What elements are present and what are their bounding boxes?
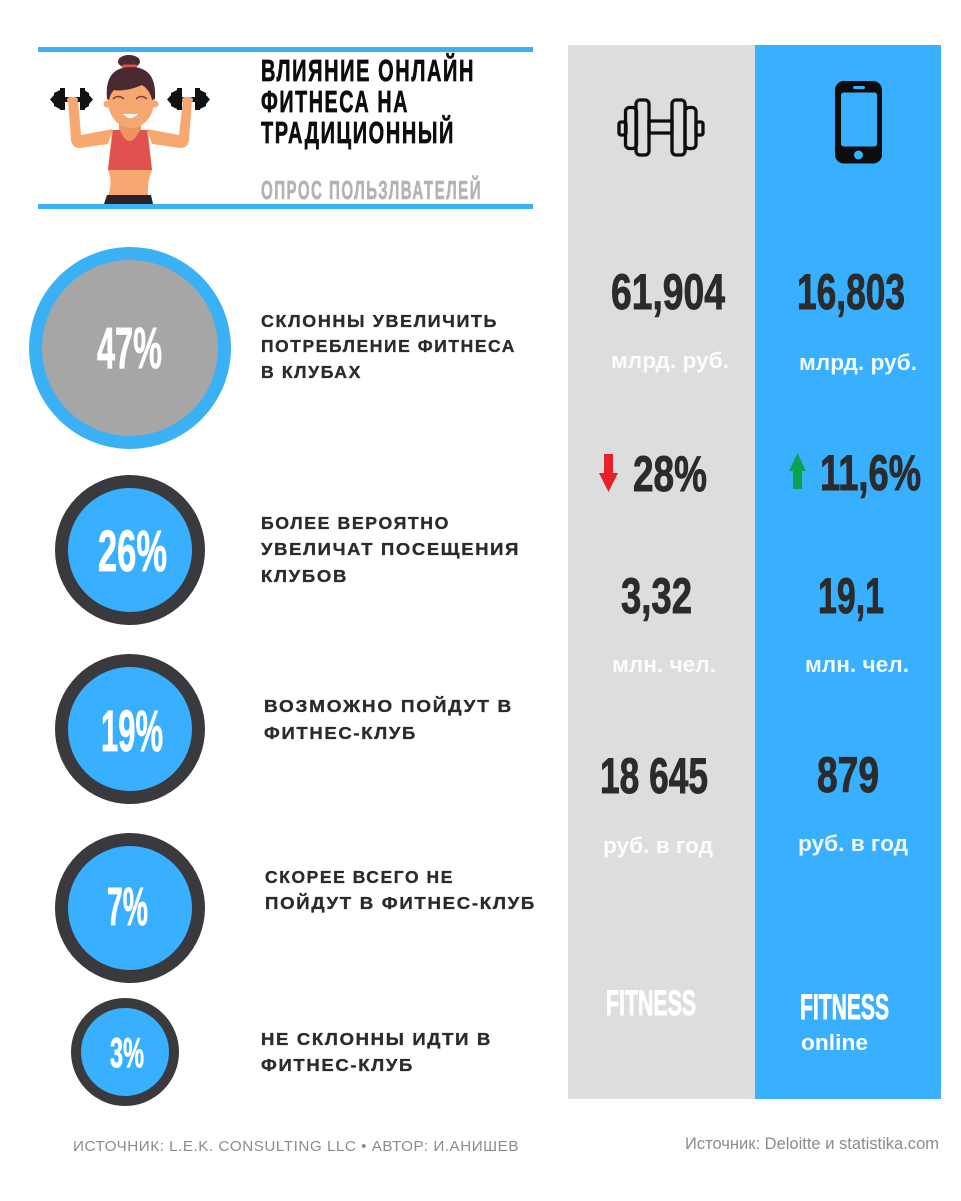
stat: 3 percent: 3% xyxy=(110,1029,144,1076)
metric: online market size: млрд. руб. xyxy=(799,350,917,375)
stat: 3 percent xyxy=(76,1003,174,1101)
icon: dumbbell xyxy=(619,100,703,155)
footer: right source: Источник: Deloitte и statistika.com xyxy=(685,1134,939,1153)
metric: traditional annual price xyxy=(600,748,713,858)
metric: online annual price: руб. в год xyxy=(798,831,908,856)
column label: fitness online xyxy=(800,988,889,1055)
metric: online market size xyxy=(797,264,917,375)
stat: 7 percent xyxy=(62,840,198,976)
header block xyxy=(38,47,533,209)
subtitle: ОПРОС ПОЛЬЗЛВАТЕЛЕЙ xyxy=(261,175,482,205)
footer: left source: ИСТОЧНИК: L.E.K. CONSULTING LLC • АВТОР: И.АНИШЕВ xyxy=(73,1138,519,1155)
column label: fitness online: FITNESS xyxy=(800,988,889,1027)
icon: woman lifting dumbbells xyxy=(50,55,210,204)
text: 3 percent description: НЕ СКЛОННЫ ИДТИ В xyxy=(261,1029,492,1049)
stat: 47 percent: 47% xyxy=(97,316,162,381)
icon: smartphone xyxy=(835,81,882,164)
title: ВЛИЯНИЕ ОНЛАЙН xyxy=(261,52,475,88)
metric: traditional users: млн. чел. xyxy=(612,652,716,677)
column label: fitness online: online xyxy=(801,1030,868,1055)
text: 7 percent description: СКОРЕЕ ВСЕГО НЕ xyxy=(265,867,454,887)
text: 47 percent description: СКЛОННЫ УВЕЛИЧИТЬ xyxy=(261,311,498,331)
title xyxy=(261,52,475,150)
metric: online change xyxy=(789,445,921,501)
text: 19 percent description: ВОЗМОЖНО ПОЙДУТ В xyxy=(264,695,513,716)
text: 47 percent description: ПОТРЕБЛЕНИЕ ФИТНЕСА xyxy=(261,336,516,356)
text: 26 percent description xyxy=(261,513,520,586)
text: 7 percent description: ПОЙДУТ В ФИТНЕС-КЛУБ xyxy=(265,892,536,913)
text: 26 percent description: УВЕЛИЧАТ ПОСЕЩЕНИЯ xyxy=(261,539,520,559)
stat: 26 percent xyxy=(62,482,198,618)
text: 7 percent description xyxy=(265,867,536,913)
metric: traditional annual price: руб. в год xyxy=(603,833,713,858)
text: 19 percent description xyxy=(264,695,513,743)
metric: online users: 19,1 xyxy=(818,568,884,624)
title: ФИТНЕСА НА xyxy=(261,84,409,119)
text: 47 percent description xyxy=(261,311,516,382)
icon: red down arrow xyxy=(599,454,618,492)
column label: fitness: FITNESS xyxy=(606,984,696,1023)
metric: online annual price: 879 xyxy=(817,747,879,803)
title: ТРАДИЦИОННЫЙ xyxy=(261,114,455,150)
panel: online fitness column xyxy=(755,45,941,1099)
metric: traditional users: 3,32 xyxy=(621,568,692,624)
metric: online annual price xyxy=(798,747,908,856)
text: 47 percent description: В КЛУБАХ xyxy=(261,362,362,382)
metric: traditional market size: 61,904 xyxy=(611,264,725,320)
stat: 7 percent: 7% xyxy=(107,877,148,937)
metric: traditional change: 28% xyxy=(633,446,707,502)
text: 26 percent description: БОЛЕЕ ВЕРОЯТНО xyxy=(261,513,450,533)
metric: online users: млн. чел. xyxy=(805,652,909,677)
metric: traditional market size: млрд. руб. xyxy=(611,348,729,373)
text: 3 percent description: ФИТНЕС-КЛУБ xyxy=(261,1055,414,1075)
text: 3 percent description xyxy=(261,1029,492,1075)
metric: online market size: 16,803 xyxy=(797,264,905,320)
metric: online users xyxy=(805,568,909,677)
text: 26 percent description: КЛУБОВ xyxy=(261,566,348,586)
panel: traditional fitness column xyxy=(568,45,755,1099)
stat: 19 percent: 19% xyxy=(101,699,163,764)
stat: 19 percent xyxy=(62,660,198,798)
metric: traditional users xyxy=(612,568,716,677)
metric: traditional market size xyxy=(611,264,729,373)
text: 19 percent description: ФИТНЕС-КЛУБ xyxy=(264,723,417,743)
metric: online change: 11,6% xyxy=(820,445,921,501)
metric: traditional annual price: 18 645 xyxy=(600,748,708,804)
stat: 26 percent: 26% xyxy=(98,519,167,584)
icon: green up arrow xyxy=(789,453,806,489)
stat: 47 percent xyxy=(36,254,224,442)
metric: traditional change xyxy=(599,446,707,502)
